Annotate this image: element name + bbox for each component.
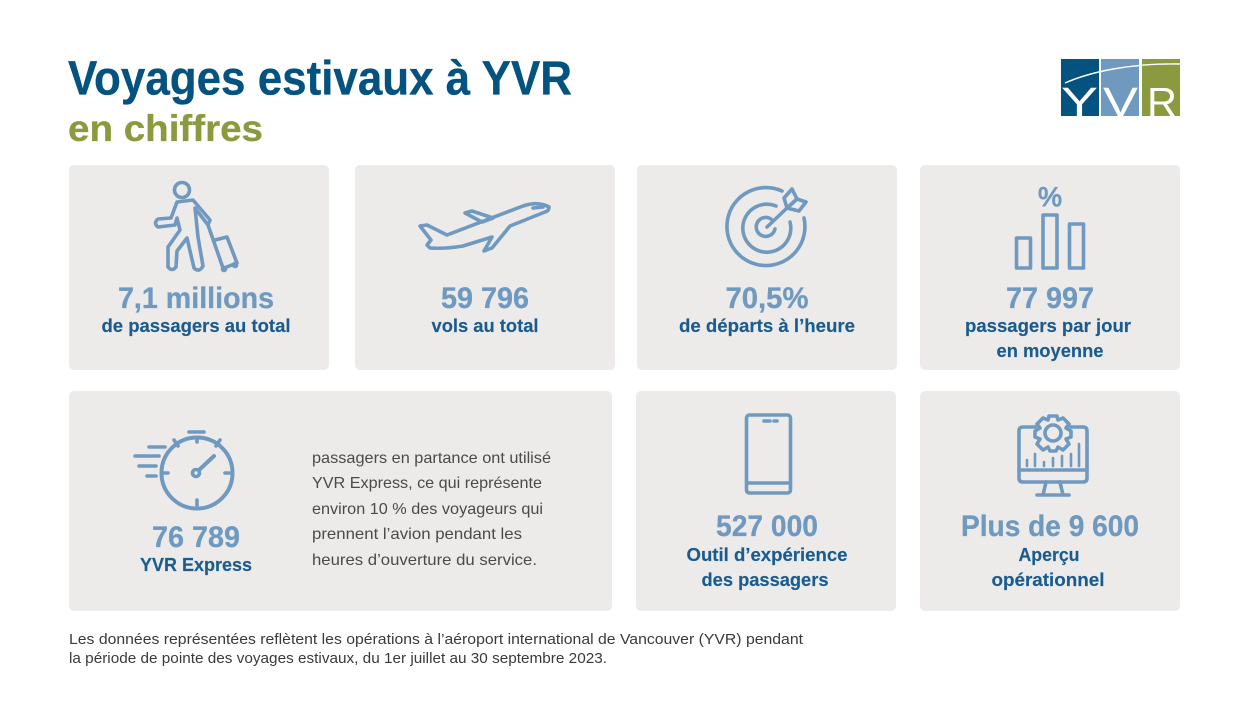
logo: YVR	[1061, 59, 1180, 125]
footnote	[69, 631, 804, 667]
icon: stopwatch	[135, 432, 232, 508]
figure: 527 000	[716, 510, 818, 543]
figure: 77 997	[1006, 282, 1094, 315]
description	[312, 450, 551, 569]
icon: percent bars: %	[1038, 182, 1062, 212]
panel: passagers au total	[69, 165, 329, 370]
label: YVR Express	[140, 555, 252, 575]
panel: départs à l'heure	[637, 165, 897, 370]
panel: aperçu opérationnel	[920, 391, 1180, 611]
description: environ 10 % des voyageurs qui	[312, 501, 543, 518]
figure: 7,1 millions	[118, 282, 274, 315]
logo: YVR: Y	[1061, 79, 1098, 125]
panel: YVR Express	[69, 391, 612, 611]
figure: Plus de 9 600	[961, 510, 1139, 543]
icon: percent bars	[1016, 182, 1084, 268]
label: de passagers au total	[102, 316, 290, 336]
panel: vols au total	[355, 165, 615, 370]
figure: 70,5%	[726, 282, 808, 315]
label: Outil d’expérience	[686, 545, 848, 565]
icon: airplane	[420, 204, 549, 251]
panel: passagers par jour	[920, 165, 1180, 370]
footnote: Les données représentées reflètent les opérations à l’aéroport international de Vancouver (YVR) pendant	[69, 631, 804, 648]
description: YVR Express, ce qui représente	[312, 475, 542, 492]
label: vols au total	[432, 316, 538, 336]
panel: outil d'expérience	[636, 391, 896, 611]
icon: monitor with gear	[1019, 416, 1087, 495]
subtitle: en chiffres	[68, 108, 263, 149]
footnote: la période de pointe des voyages estivaux, du 1er juillet au 30 septembre 2023.	[69, 650, 607, 667]
figure: 76 789	[152, 521, 240, 554]
description: passagers en partance ont utilisé	[312, 450, 551, 467]
logo: YVR: R	[1147, 79, 1177, 125]
panel: outil d'expérience: des passagers	[702, 570, 828, 590]
panel: aperçu opérationnel: opérationnel	[992, 570, 1104, 590]
figure: 59 796	[441, 282, 529, 315]
label: de départs à l’heure	[679, 316, 855, 336]
description: heures d’ouverture du service.	[312, 552, 537, 569]
icon: traveller with suitcase	[156, 182, 237, 270]
description: prennent l’avion pendant les	[312, 526, 522, 543]
logo: YVR: V	[1103, 79, 1139, 125]
label: Aperçu	[1018, 545, 1080, 565]
panel: passagers par jour: en moyenne	[996, 341, 1104, 361]
icon: target with arrow	[727, 188, 806, 266]
icon: smartphone	[746, 415, 790, 493]
title: Voyages estivaux à YVR	[68, 52, 572, 106]
label: passagers par jour	[965, 316, 1131, 336]
